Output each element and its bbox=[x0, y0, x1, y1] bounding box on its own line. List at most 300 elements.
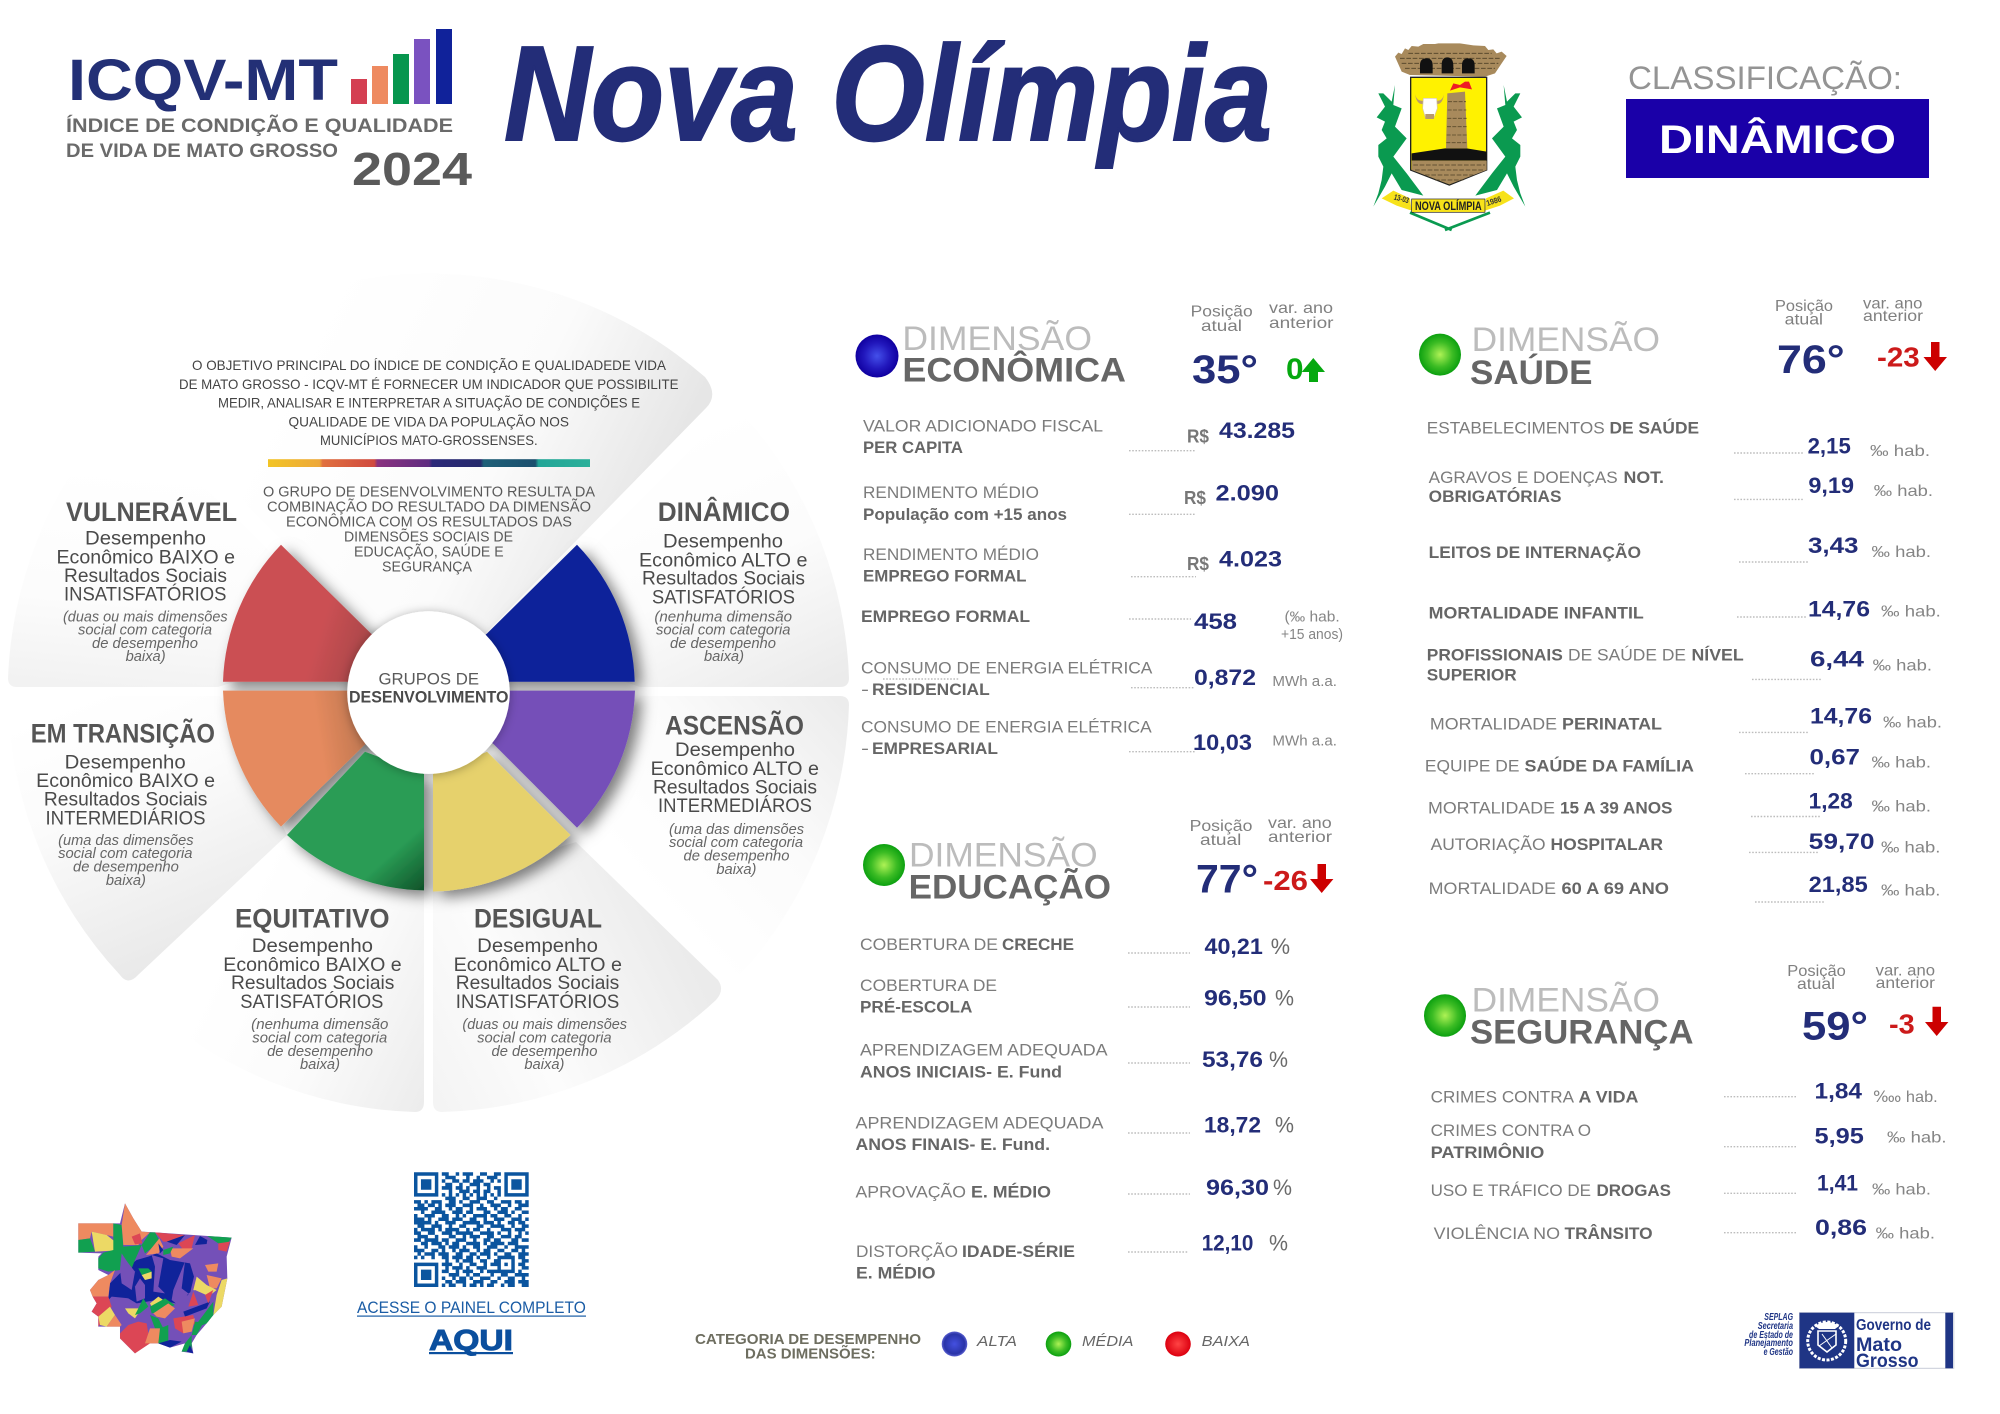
link text: acesse o painel: ACESSE O PAINEL COMPLETO bbox=[357, 1299, 586, 1317]
wheel center circle: DESENVOLVIMENTO bbox=[349, 687, 508, 706]
group: desigual: de desempenho bbox=[492, 1044, 597, 1060]
row: agravos bbox=[1429, 469, 1933, 506]
row: creche: CRECHE bbox=[1002, 936, 1074, 954]
icon: green performance sphere bbox=[1424, 994, 1466, 1037]
heading: saúde bbox=[1470, 321, 1660, 392]
column heading: posição bbox=[1787, 963, 1846, 993]
column heading: posição: Posição bbox=[1775, 298, 1833, 315]
row: emprego formal: 458 bbox=[1194, 609, 1237, 634]
row: crimes contra o patrimônio: PATRIMÔNIO bbox=[1431, 1143, 1544, 1162]
row: rendimento médio emprego formal bbox=[863, 545, 1282, 586]
heading: saúde: DIMENSÃO bbox=[1472, 321, 1660, 359]
logo year: 2024 bbox=[352, 143, 472, 195]
row: crimes contra a vida: ‱ hab. bbox=[1873, 1089, 1938, 1106]
variation -23: -23 bbox=[1877, 342, 1920, 373]
group: em transição: Desempenho bbox=[65, 751, 186, 773]
arrow down bbox=[1925, 1007, 1948, 1036]
group: em transição: de desempenho bbox=[73, 860, 179, 876]
group: dinâmico: SATISFATÓRIOS bbox=[652, 586, 795, 608]
row: distorção bbox=[856, 1231, 1288, 1283]
map: Mato Grosso municipalities bbox=[78, 1203, 232, 1353]
row: saúde da família: 0,67 bbox=[1810, 744, 1860, 769]
group: ascensão: INTERMEDIÁROS bbox=[658, 794, 812, 817]
row: emprego formal: +15 anos) bbox=[1281, 627, 1343, 643]
row: saúde da família: SAÚDE DA FAMÍLIA bbox=[1524, 757, 1694, 776]
group explanation text: SEGURANÇA bbox=[382, 558, 472, 575]
row: leitos: 3,43 bbox=[1808, 533, 1858, 558]
classification badge: DINÂMICO bbox=[1659, 116, 1896, 162]
group explanation text bbox=[263, 483, 595, 575]
row: creche: % bbox=[1271, 934, 1290, 959]
row: agravos: AGRAVOS E DOENÇAS bbox=[1429, 469, 1618, 487]
row: perinatal: ‰ hab. bbox=[1883, 715, 1942, 732]
row: energia residencial bbox=[861, 658, 1337, 699]
group: vulnerável bbox=[56, 496, 237, 665]
group: dinâmico: de desempenho bbox=[670, 636, 776, 652]
group: vulnerável: Desempenho bbox=[85, 528, 206, 550]
group: ascensão bbox=[651, 710, 819, 878]
group: ascensão: ASCENSÃO bbox=[665, 710, 804, 740]
logo subtitle: DE VIDA DE MATO GROSSO bbox=[66, 141, 338, 162]
group: dinâmico bbox=[639, 496, 808, 665]
objective text: O OBJETIVO PRINCIPAL DO ÍNDICE DE CONDIÇÃO E QUALIDADEDE VIDA bbox=[192, 357, 667, 373]
legend item: baixa bbox=[1165, 1332, 1250, 1356]
group: vulnerável: (duas ou mais dimensões bbox=[63, 609, 228, 625]
row: profissionais: 6,44 bbox=[1810, 646, 1865, 671]
column heading: variação: anterior bbox=[1876, 975, 1936, 992]
objective text: MUNICÍPIOS MATO-GROSSENSES. bbox=[320, 432, 538, 448]
row: energia empresarial: EMPRESARIAL bbox=[872, 740, 998, 758]
group: equitativo: de desempenho bbox=[267, 1044, 373, 1060]
row: mortalidade 60 a 69: MORTALIDADE bbox=[1429, 880, 1556, 898]
objective text: QUALIDADE DE VIDA DA POPULAÇÃO NOS bbox=[288, 414, 569, 430]
variation -26: -26 bbox=[1263, 865, 1308, 896]
row: saúde da família: EQUIPE DE bbox=[1425, 758, 1519, 776]
row: crimes contra o patrimônio bbox=[1431, 1122, 1946, 1162]
row: mortalidade infantil bbox=[1429, 596, 1941, 623]
row: rendimento médio população: 2.090 bbox=[1216, 481, 1279, 506]
shield bbox=[1411, 77, 1487, 185]
column heading: posição bbox=[1190, 818, 1253, 849]
group: vulnerável: VULNERÁVEL bbox=[66, 496, 237, 527]
legend item: média bbox=[1046, 1332, 1133, 1356]
row: emprego formal bbox=[861, 608, 1343, 643]
legend item: alta: ALTA bbox=[976, 1333, 1017, 1350]
row: leitos bbox=[1429, 533, 1931, 562]
row: distorção: % bbox=[1269, 1231, 1288, 1256]
row: pré-escola: 96,50 bbox=[1204, 986, 1266, 1011]
row: anos finais: 18,72 bbox=[1204, 1113, 1261, 1138]
column heading: variação bbox=[1269, 300, 1334, 332]
group: equitativo: social com categoria bbox=[252, 1030, 387, 1046]
row: emprego formal: (‰ hab. bbox=[1284, 610, 1340, 626]
group: em transição: EM TRANSIÇÃO bbox=[31, 717, 215, 748]
row: rendimento médio população: População com +15 anos bbox=[863, 506, 1067, 524]
group: equitativo: Desempenho bbox=[252, 935, 373, 957]
row: valor adicionado fiscal: R$ bbox=[1187, 427, 1209, 447]
row: estabelecimentos bbox=[1427, 419, 1930, 460]
heading: segurança: SEGURANÇA bbox=[1470, 1013, 1694, 1051]
row: energia empresarial bbox=[861, 717, 1337, 758]
group: ascensão: Econômico ALTO e bbox=[651, 758, 819, 780]
group: equitativo: SATISFATÓRIOS bbox=[240, 990, 383, 1013]
row: creche bbox=[860, 934, 1290, 959]
row: drogas: ‰ hab. bbox=[1872, 1181, 1931, 1198]
row: creche: COBERTURA DE bbox=[860, 936, 998, 954]
group: em transição: social com categoria bbox=[58, 846, 192, 862]
row: crimes contra a vida: A VIDA bbox=[1578, 1088, 1638, 1106]
row: valor adicionado fiscal bbox=[863, 418, 1295, 457]
heading: segurança: DIMENSÃO bbox=[1472, 982, 1660, 1020]
group: equitativo: baixa) bbox=[300, 1057, 340, 1073]
column heading: variação: anterior bbox=[1269, 315, 1334, 332]
heading: educação: DIMENSÃO bbox=[909, 837, 1098, 875]
row: perinatal: PERINATAL bbox=[1562, 716, 1662, 734]
row: mortalidade 15 a 39: 15 A 39 ANOS bbox=[1560, 800, 1672, 818]
group: ascensão: Resultados Sociais bbox=[653, 776, 817, 798]
row: profissionais: SUPERIOR bbox=[1427, 667, 1517, 685]
group: equitativo: Resultados Sociais bbox=[231, 972, 395, 994]
row: mortalidade 15 a 39: ‰ hab. bbox=[1872, 799, 1931, 816]
row: profissionais bbox=[1427, 646, 1932, 685]
rank 35: 35° bbox=[1192, 348, 1258, 392]
legend item: baixa: BAIXA bbox=[1202, 1333, 1250, 1350]
group: desigual: Econômico ALTO e bbox=[454, 954, 622, 976]
row: anos finais: APRENDIZAGEM ADEQUADA bbox=[856, 1114, 1103, 1132]
objective text: MEDIR, ANALISAR E INTERPRETAR A SITUAÇÃO DE CONDIÇÕES E bbox=[218, 395, 640, 411]
column heading: posição: atual bbox=[1797, 976, 1835, 993]
group: ascensão: baixa) bbox=[716, 862, 756, 878]
heading: educação: EDUCAÇÃO bbox=[909, 868, 1111, 906]
row: energia residencial: 0,872 bbox=[1194, 665, 1256, 690]
group: equitativo bbox=[223, 904, 402, 1073]
row: aprovação: E. MÉDIO bbox=[971, 1183, 1051, 1202]
row: emprego formal: EMPREGO FORMAL bbox=[861, 608, 1030, 626]
group: ascensão: (uma das dimensões bbox=[669, 822, 804, 838]
row: drogas: USO E TRÁFICO DE bbox=[1431, 1181, 1591, 1200]
row: leitos: LEITOS DE INTERNAÇÃO bbox=[1429, 542, 1641, 562]
row: trânsito: TRÂNSITO bbox=[1564, 1224, 1653, 1243]
title: municipality name: Nova Olímpia bbox=[504, 18, 1272, 169]
logo bar chart icon bbox=[351, 29, 452, 104]
logo: Governo de Mato Grosso: Governo de bbox=[1856, 1317, 1931, 1334]
QR code bbox=[414, 1174, 529, 1285]
group explanation text: O GRUPO DE DESENVOLVIMENTO RESULTA DA bbox=[263, 483, 595, 500]
row: mortalidade 15 a 39: MORTALIDADE bbox=[1428, 800, 1555, 818]
row: aprovação: % bbox=[1273, 1175, 1292, 1200]
group: vulnerável: Resultados Sociais bbox=[64, 565, 227, 587]
row: rendimento médio emprego formal: EMPREGO FORMAL bbox=[863, 568, 1026, 586]
column heading: variação: var. ano bbox=[1269, 300, 1333, 317]
row: rendimento médio emprego formal: R$ bbox=[1187, 554, 1209, 574]
row: drogas bbox=[1431, 1171, 1931, 1200]
heading: econômica: DIMENSÃO bbox=[902, 320, 1092, 358]
column heading: posição: Posição bbox=[1191, 304, 1253, 321]
row: autorização hospitalar: 59,70 bbox=[1809, 829, 1875, 854]
row: perinatal bbox=[1430, 704, 1942, 734]
logo: ICQV-MT 2024 bbox=[66, 29, 472, 195]
panel: dimensão educação bbox=[856, 815, 1333, 1283]
rank 59: 59° bbox=[1802, 1004, 1868, 1048]
logo subtitle bbox=[66, 115, 453, 162]
row: rendimento médio emprego formal: 4.023 bbox=[1219, 547, 1282, 572]
group: ascensão: social com categoria bbox=[669, 835, 803, 851]
logo subtitle: ÍNDICE DE CONDIÇÃO E QUALIDADE bbox=[66, 115, 453, 137]
row: autorização hospitalar: ‰ hab. bbox=[1881, 839, 1940, 856]
row: agravos: 9,19 bbox=[1808, 473, 1854, 498]
row: rendimento médio população: R$ bbox=[1184, 488, 1206, 508]
row: profissionais: DE SAÚDE DE bbox=[1568, 646, 1686, 665]
classification label: CLASSIFICAÇÃO: bbox=[1628, 60, 1902, 96]
row: mortalidade 15 a 39 bbox=[1428, 788, 1931, 818]
wheel colored segments bbox=[223, 545, 635, 892]
row: energia empresarial: MWh a.a. bbox=[1272, 733, 1337, 749]
row: valor adicionado fiscal: PER CAPITA bbox=[863, 439, 963, 457]
row: agravos: NOT. bbox=[1624, 469, 1664, 487]
group: desigual: Desempenho bbox=[477, 935, 598, 957]
legend title: CATEGORIA DE DESEMPENHO bbox=[695, 1331, 921, 1348]
group: em transição: INTERMEDIÁRIOS bbox=[46, 806, 206, 829]
row: distorção: DISTORÇÃO bbox=[856, 1241, 958, 1261]
group: vulnerável: de desempenho bbox=[92, 636, 198, 652]
group: em transição: (uma das dimensões bbox=[58, 833, 194, 849]
row: profissionais: PROFISSIONAIS bbox=[1427, 647, 1563, 665]
legend: performance categories bbox=[695, 1331, 1250, 1362]
logo: Governo de Mato Grosso: Mato bbox=[1856, 1335, 1902, 1356]
row: distorção: E. MÉDIO bbox=[856, 1264, 936, 1283]
row: perinatal: 14,76 bbox=[1810, 704, 1872, 728]
column heading: variação: var. ano bbox=[1876, 962, 1935, 979]
row: drogas: DROGAS bbox=[1596, 1182, 1671, 1200]
group: equitativo: EQUITATIVO bbox=[235, 904, 390, 934]
ribbon: NOVA OLÍMPIA bbox=[1415, 198, 1482, 213]
row: agravos: ‰ hab. bbox=[1874, 483, 1933, 500]
column heading: posição: Posição bbox=[1787, 963, 1846, 980]
group explanation text: ECONÔMICA COM OS RESULTADOS DAS bbox=[286, 513, 572, 530]
group: dinâmico: Econômico ALTO e bbox=[639, 549, 808, 571]
wheel outer segments bbox=[8, 274, 849, 1112]
column heading: posição: atual bbox=[1785, 311, 1823, 328]
group: dinâmico: baixa) bbox=[704, 649, 744, 665]
column heading: posição bbox=[1775, 298, 1833, 328]
group explanation text: EDUCAÇÃO, SAÚDE E bbox=[354, 543, 504, 560]
column heading: posição bbox=[1191, 304, 1253, 335]
logo: SEPLAG bbox=[1744, 1312, 1793, 1358]
row: mortalidade 60 a 69: ‰ hab. bbox=[1881, 882, 1940, 899]
row: trânsito: 0,86 bbox=[1815, 1215, 1867, 1240]
row: aprovação bbox=[856, 1175, 1292, 1202]
panel: dimensão segurança bbox=[1424, 962, 1948, 1243]
group: dinâmico: Desempenho bbox=[663, 530, 783, 552]
group: equitativo: Econômico BAIXO e bbox=[223, 954, 402, 976]
legend item: alta bbox=[942, 1332, 1017, 1356]
row: distorção: 12,10 bbox=[1202, 1231, 1253, 1256]
arrow up bbox=[1302, 358, 1325, 382]
objective text: DE MATO GROSSO - ICQV-MT É FORNECER UM INDICADOR QUE POSSIBILITE bbox=[179, 376, 678, 392]
row: profissionais: ‰ hab. bbox=[1873, 657, 1932, 674]
group explanation text: DIMENSÕES SOCIAIS DE bbox=[344, 528, 513, 545]
row: pré-escola: PRÉ-ESCOLA bbox=[860, 998, 972, 1017]
row: crimes contra o patrimônio: ‰ hab. bbox=[1887, 1129, 1946, 1146]
row: profissionais: NÍVEL bbox=[1692, 646, 1744, 665]
row: energia empresarial: - bbox=[861, 740, 869, 758]
row: pré-escola: % bbox=[1275, 986, 1294, 1011]
row: mortalidade 60 a 69: 21,85 bbox=[1809, 872, 1868, 897]
row: anos iniciais: ANOS INICIAIS- E. Fund bbox=[860, 1063, 1062, 1081]
row: anos finais: % bbox=[1275, 1113, 1294, 1138]
row: rendimento médio população bbox=[863, 481, 1279, 524]
row: aprovação: 96,30 bbox=[1206, 1175, 1269, 1200]
heading: segurança bbox=[1470, 982, 1694, 1051]
column heading: posição: atual bbox=[1201, 318, 1242, 335]
group: desigual: baixa) bbox=[524, 1057, 564, 1073]
column heading: variação bbox=[1268, 815, 1333, 846]
ribbon bbox=[1382, 191, 1514, 213]
variation 0: 0 bbox=[1286, 353, 1304, 386]
logo: Governo de Mato Grosso: Grosso bbox=[1856, 1351, 1919, 1372]
group: desigual: (duas ou mais dimensões bbox=[462, 1017, 627, 1033]
row: autorização hospitalar: AUTORIAÇÃO bbox=[1431, 834, 1546, 854]
row: crimes contra o patrimônio: CRIMES CONTRA O bbox=[1431, 1122, 1591, 1140]
row: trânsito bbox=[1434, 1215, 1935, 1243]
row: energia residencial: - bbox=[861, 681, 869, 699]
group: dinâmico: DINÂMICO bbox=[658, 496, 790, 527]
group: em transição: baixa) bbox=[106, 873, 146, 889]
logo: Governo de Mato Grosso bbox=[1800, 1313, 1954, 1372]
group: dinâmico: social com categoria bbox=[656, 623, 790, 639]
row: anos finais: ANOS FINAIS- E. Fund. bbox=[856, 1136, 1050, 1154]
row: energia residencial: RESIDENCIAL bbox=[872, 681, 990, 699]
column heading: posição: Posição bbox=[1190, 818, 1253, 835]
wheel center circle bbox=[347, 611, 510, 774]
row: mortalidade 60 a 69: 60 A 69 ANO bbox=[1562, 880, 1669, 898]
ribbon: 13-03 bbox=[1393, 193, 1410, 205]
link text: aqui: AQUI bbox=[429, 1325, 513, 1357]
heading: educação bbox=[909, 837, 1111, 906]
row: mortalidade infantil: 14,76 bbox=[1808, 596, 1870, 622]
icon: blue performance sphere bbox=[856, 334, 898, 378]
row: saúde da família: ‰ hab. bbox=[1872, 755, 1931, 772]
icon: green performance sphere bbox=[1419, 334, 1461, 376]
panel: dimensão saúde bbox=[1419, 295, 1947, 902]
row: energia empresarial: CONSUMO DE ENERGIA ELÉTRICA bbox=[861, 717, 1152, 736]
row: autorização hospitalar bbox=[1431, 829, 1940, 856]
crown bbox=[1395, 43, 1507, 77]
logo wordmark: ICQV-MT bbox=[68, 48, 338, 113]
group: vulnerável: social com categoria bbox=[78, 623, 212, 639]
group: vulnerável: Econômico BAIXO e bbox=[56, 547, 235, 569]
group: dinâmico: Resultados Sociais bbox=[642, 568, 805, 590]
row: crimes contra a vida: 1,84 bbox=[1814, 1078, 1863, 1103]
wheel center circle: GRUPOS DE bbox=[378, 670, 479, 688]
row: crimes contra a vida bbox=[1431, 1078, 1938, 1106]
column heading: variação: var. ano bbox=[1268, 815, 1332, 832]
logo: SEPLAG: SEPLAG bbox=[1764, 1312, 1793, 1323]
rank 77: 77° bbox=[1196, 858, 1258, 902]
row: energia residencial: MWh a.a. bbox=[1272, 674, 1337, 690]
row: perinatal: MORTALIDADE bbox=[1430, 716, 1557, 734]
row: trânsito: ‰ hab. bbox=[1876, 1225, 1935, 1242]
column heading: variação bbox=[1876, 962, 1936, 992]
group: desigual: Resultados Sociais bbox=[456, 972, 620, 994]
panel: dimensão econômica bbox=[856, 300, 1343, 758]
heading: econômica bbox=[902, 320, 1126, 390]
row: saúde da família bbox=[1425, 744, 1931, 776]
arrow down bbox=[1310, 864, 1333, 893]
row: mortalidade 15 a 39: 1,28 bbox=[1809, 788, 1853, 813]
logo: SEPLAG: Planejamento bbox=[1744, 1338, 1793, 1349]
row: rendimento médio emprego formal: RENDIMENTO MÉDIO bbox=[863, 545, 1039, 564]
group: em transição: Econômico BAIXO e bbox=[36, 770, 215, 792]
row: valor adicionado fiscal: VALOR ADICIONADO FISCAL bbox=[863, 418, 1103, 436]
row: anos iniciais: 53,76 bbox=[1202, 1047, 1263, 1072]
group: desigual: DESIGUAL bbox=[474, 904, 602, 934]
ribbon: 1986 bbox=[1485, 194, 1503, 208]
row: autorização hospitalar: HOSPITALAR bbox=[1550, 836, 1663, 854]
row: anos iniciais bbox=[860, 1041, 1288, 1081]
group: desigual: INSATISFATÓRIOS bbox=[456, 990, 619, 1013]
legend item: média: MÉDIA bbox=[1082, 1333, 1133, 1350]
row: aprovação: APROVAÇÃO bbox=[856, 1182, 966, 1202]
row: valor adicionado fiscal: 43.285 bbox=[1219, 418, 1295, 443]
row: trânsito: VIOLÊNCIA NO bbox=[1434, 1224, 1560, 1243]
group: desigual bbox=[454, 904, 627, 1073]
row: rendimento médio população: RENDIMENTO MÉDIO bbox=[863, 483, 1039, 502]
group: em transição: Resultados Sociais bbox=[44, 788, 208, 810]
objective text bbox=[179, 357, 678, 448]
group: dinâmico: (nenhuma dimensão bbox=[654, 609, 792, 625]
variation -3: -3 bbox=[1889, 1008, 1915, 1039]
group: vulnerável: INSATISFATÓRIOS bbox=[64, 583, 226, 606]
group: desigual: social com categoria bbox=[477, 1030, 612, 1046]
row: creche: 40,21 bbox=[1204, 934, 1263, 959]
logo: SEPLAG: de Estado de bbox=[1749, 1330, 1793, 1341]
arrow down bbox=[1924, 342, 1947, 371]
wheel: development groups bbox=[8, 274, 849, 1112]
column heading: variação bbox=[1863, 295, 1924, 325]
column heading: variação: anterior bbox=[1863, 308, 1924, 325]
legend title: DAS DIMENSÕES: bbox=[745, 1344, 876, 1362]
rank 76: 76° bbox=[1777, 338, 1845, 382]
logo: SEPLAG: e Gestão bbox=[1764, 1347, 1793, 1358]
row: estabelecimentos: ESTABELECIMENTOS bbox=[1427, 420, 1605, 438]
row: pré-escola bbox=[860, 977, 1294, 1017]
column heading: variação: anterior bbox=[1268, 829, 1333, 846]
column heading: posição: atual bbox=[1200, 832, 1241, 849]
row: pré-escola: COBERTURA DE bbox=[860, 977, 997, 995]
row: energia empresarial: 10,03 bbox=[1193, 730, 1252, 755]
logo: SEPLAG: Secretaria bbox=[1758, 1321, 1793, 1332]
group explanation text: COMBINAÇÃO DO RESULTADO DA DIMENSÃO bbox=[267, 498, 591, 515]
row: estabelecimentos: 2,15 bbox=[1808, 433, 1851, 458]
group: ascensão: Desempenho bbox=[675, 739, 795, 761]
emblem bbox=[1808, 1322, 1846, 1360]
row: mortalidade 60 a 69 bbox=[1429, 872, 1940, 902]
row: distorção: IDADE-SÉRIE bbox=[962, 1242, 1075, 1261]
group: ascensão: de desempenho bbox=[684, 848, 790, 864]
row: estabelecimentos: DE SAÚDE bbox=[1610, 419, 1699, 438]
group: equitativo: (nenhuma dimensão bbox=[251, 1017, 388, 1033]
icon: municipal coat of arms bbox=[1373, 43, 1525, 230]
row: mortalidade infantil: ‰ hab. bbox=[1881, 604, 1941, 620]
row: anos iniciais: APRENDIZAGEM ADEQUADA bbox=[860, 1041, 1108, 1059]
row: mortalidade infantil: MORTALIDADE INFANTIL bbox=[1429, 605, 1644, 623]
legend title bbox=[695, 1331, 921, 1362]
row: energia residencial: CONSUMO DE ENERGIA ELÉTRICA bbox=[861, 658, 1152, 677]
row: anos finais bbox=[856, 1113, 1294, 1154]
row: drogas: 1,41 bbox=[1817, 1171, 1858, 1196]
row: leitos: ‰ hab. bbox=[1872, 544, 1931, 561]
